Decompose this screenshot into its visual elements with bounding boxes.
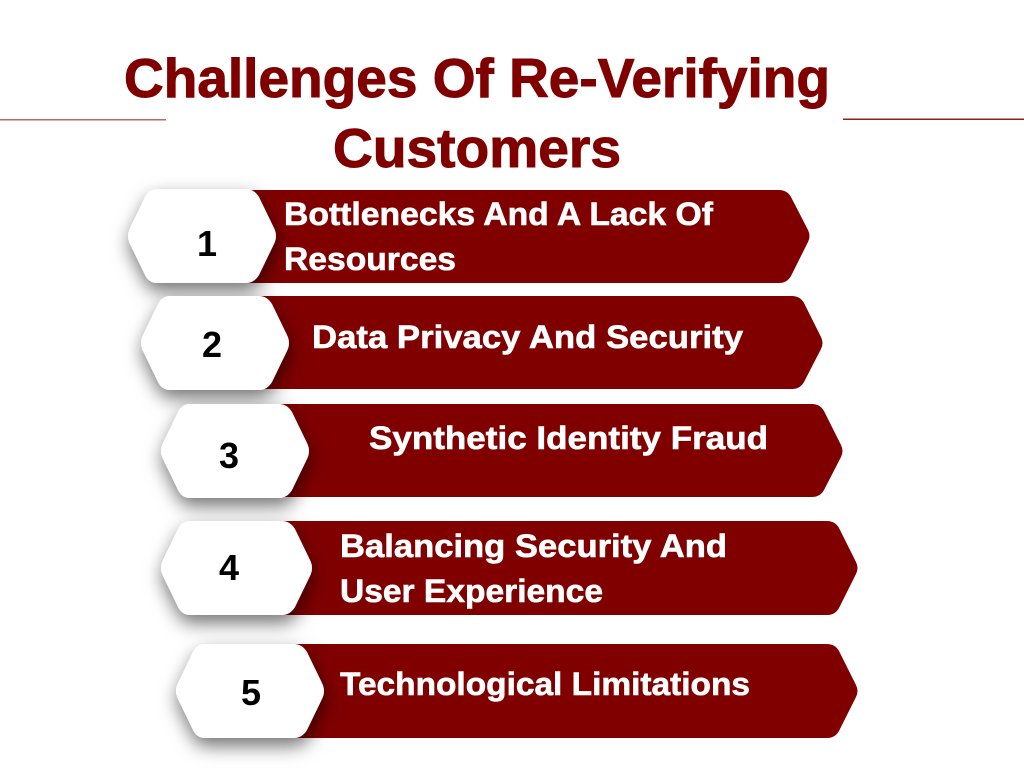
item 4 label: Balancing Security And	[340, 528, 727, 564]
item 4: balancing security	[161, 521, 858, 615]
item 4 hexagon	[161, 521, 312, 615]
item 3 number: 3	[219, 435, 239, 476]
item 2 bar	[226, 296, 822, 389]
item 1 label: Bottlenecks And A Lack Of	[284, 196, 713, 232]
item 5 label: Technological Limitations	[340, 666, 750, 702]
item 1 number: 1	[197, 223, 217, 264]
item 2 hexagon	[141, 296, 289, 390]
item 4 label: User Experience	[340, 573, 603, 609]
item 1 hexagon	[128, 189, 276, 283]
left title rule	[0, 119, 166, 120]
item 5 number: 5	[241, 672, 261, 713]
item 3 bar	[240, 404, 842, 497]
title: Customers	[333, 117, 621, 179]
item 1 label: Resources	[284, 241, 456, 277]
item 1 bar	[226, 190, 810, 283]
item 4 label	[340, 528, 727, 609]
right title rule	[843, 118, 1024, 120]
item 1: bottlenecks	[128, 189, 810, 283]
item 1 label	[284, 196, 713, 277]
item 2 number: 2	[202, 324, 222, 365]
title	[124, 47, 830, 179]
item 3: synthetic identity	[161, 404, 842, 498]
item 3 label: Synthetic Identity Fraud	[369, 420, 768, 456]
item 5: technological limitations	[176, 644, 858, 738]
title: Challenges Of Re-Verifying	[124, 47, 830, 109]
item 2 label: Data Privacy And Security	[312, 319, 743, 355]
item 3 hexagon	[161, 404, 309, 498]
item 5 hexagon	[176, 644, 324, 738]
item 4 number: 4	[219, 547, 239, 588]
item 5 bar	[261, 644, 858, 738]
item 2: data privacy	[141, 296, 822, 390]
item 4 bar	[250, 521, 858, 615]
